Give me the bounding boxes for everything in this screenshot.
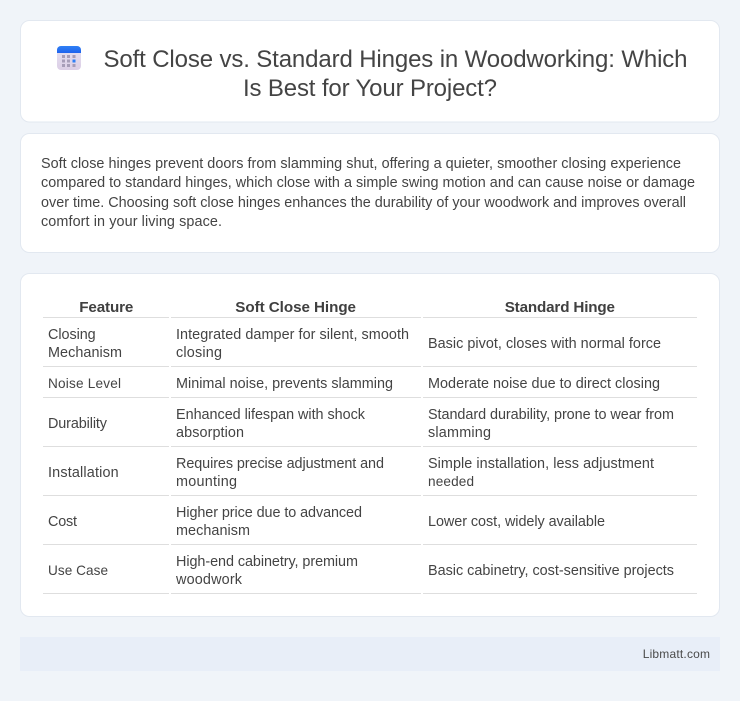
row: installation: Installation — [48, 465, 119, 481]
row: durability: Durability — [48, 416, 108, 432]
row: durability: Standard durability, prone to wear from — [428, 407, 674, 423]
footer source label: Libmatt.com — [643, 647, 710, 661]
row: closing mechanism — [48, 327, 661, 361]
title — [104, 46, 688, 102]
title: Soft Close vs. Standard Hinges in Woodworking: Which — [104, 46, 688, 73]
row: closing mechanism: Basic pivot, closes with normal force — [428, 336, 661, 352]
title: Is Best for Your Project? — [243, 75, 497, 102]
footer — [20, 637, 720, 671]
row: durability — [48, 407, 674, 441]
row: durability: Enhanced lifespan with shock — [176, 407, 366, 423]
row: installation: mounting — [176, 474, 237, 490]
row: cost: Lower cost, widely available — [428, 514, 605, 530]
row: installation: Requires precise adjustment and — [176, 456, 384, 472]
table header row: Feature — [79, 299, 133, 316]
row: cost: Higher price due to advanced — [176, 505, 362, 521]
row: closing mechanism: Mechanism — [48, 345, 122, 361]
intro paragraph: compared to standard hinges, which close with a simple swing motion and can cause noise or damage — [41, 175, 695, 191]
table header row — [79, 299, 615, 316]
row: closing mechanism: Closing — [48, 327, 96, 343]
row: closing mechanism: Integrated damper for silent, smooth — [176, 327, 409, 343]
table header row: Soft Close Hinge — [235, 299, 356, 316]
row: installation: Simple installation, less adjustment — [428, 456, 654, 472]
header panel — [20, 20, 720, 122]
row: use case: High-end cabinetry, premium — [176, 554, 358, 570]
intro paragraph — [41, 156, 695, 230]
row: closing mechanism: closing — [176, 345, 222, 361]
row: installation — [48, 456, 654, 490]
row: noise level — [48, 376, 660, 392]
row: use case: woodwork — [175, 572, 243, 588]
intro paragraph: Soft close hinges prevent doors from slamming shut, offering a quieter, smoother closing experience — [41, 156, 681, 172]
row: durability: absorption — [176, 425, 244, 441]
row: noise level: Noise Level — [48, 376, 121, 391]
row: durability: slamming — [428, 425, 491, 441]
table header row: Standard Hinge — [505, 299, 615, 316]
row: use case: Basic cabinetry, cost-sensitive projects — [428, 563, 674, 579]
intro paragraph: over time. Choosing soft close hinges enhances the durability of your woodwork and improves overall — [41, 195, 686, 211]
intro paragraph: comfort in your living space. — [41, 214, 222, 230]
row: noise level: Minimal noise, prevents slamming — [176, 376, 393, 392]
row: noise level: Moderate noise due to direct closing — [428, 376, 660, 392]
intro text panel — [20, 134, 720, 252]
comparison table panel — [20, 274, 720, 616]
icon: calendar — [57, 46, 81, 70]
row: installation: needed — [428, 474, 474, 489]
row: cost: Cost — [48, 514, 77, 530]
row: use case — [48, 554, 674, 588]
row: cost — [48, 505, 605, 539]
row: cost: mechanism — [176, 523, 250, 539]
row: use case: Use Case — [48, 563, 108, 578]
